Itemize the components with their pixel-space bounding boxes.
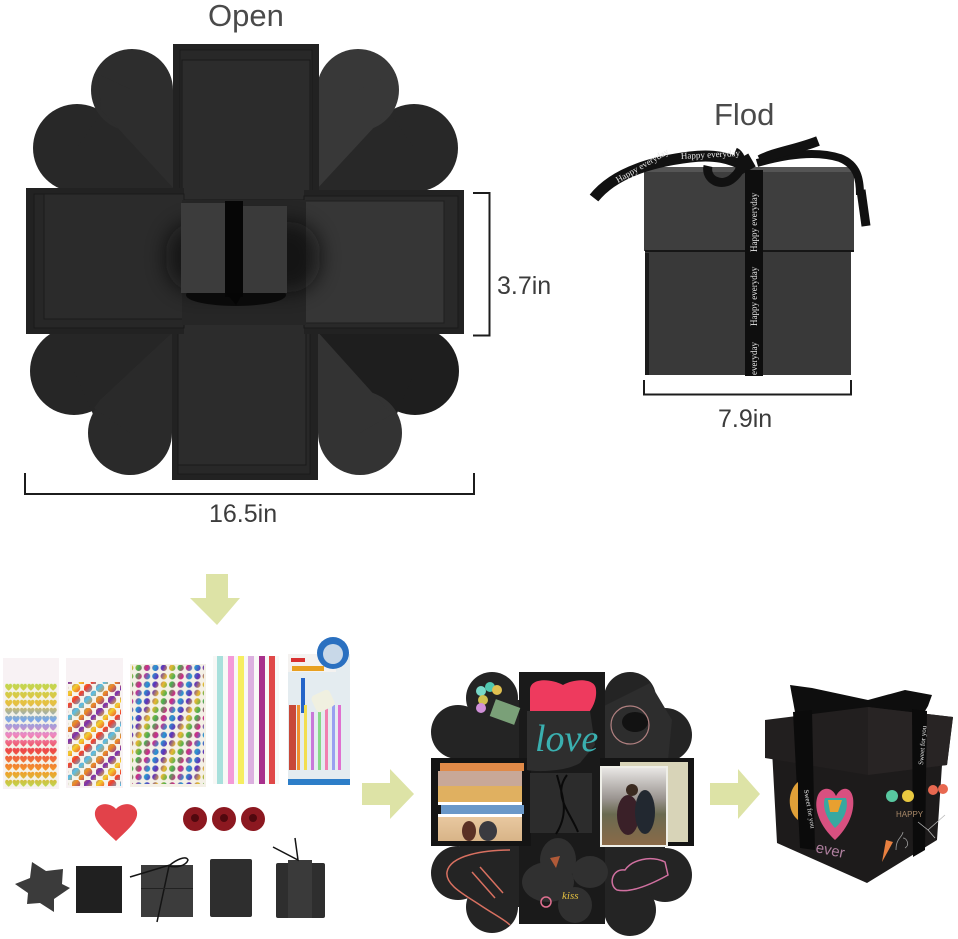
- vertical ribbon: Happy everyday: [749, 266, 759, 326]
- right photo panel: [600, 758, 694, 846]
- rainbow heart interior: [824, 798, 847, 828]
- panel: left: [26, 188, 184, 334]
- lid top edge: [646, 167, 852, 172]
- left photo panel: [431, 758, 531, 846]
- sticker sheet: flowers: [66, 658, 123, 788]
- couple photo: [600, 766, 668, 847]
- star sticker: [902, 790, 914, 802]
- panel: top: [173, 44, 319, 200]
- top envelope: [527, 711, 595, 771]
- ribbon tails and bow: [594, 141, 866, 226]
- knot shadow: [166, 222, 320, 292]
- vertical ribbon: [745, 170, 763, 376]
- pink heart doodle: bottom left: [447, 850, 510, 925]
- heart flap: top left: [33, 49, 175, 192]
- box body: [645, 251, 851, 375]
- kiss lettering: kiss: [562, 890, 578, 902]
- black pinwheel insert: [15, 862, 70, 912]
- ribbon text on band: Happy everyday: [681, 148, 741, 161]
- folded paper flap: top right: [600, 683, 672, 765]
- rose: [241, 807, 265, 831]
- back photo: hands: [620, 762, 688, 842]
- black square card: [76, 866, 122, 913]
- center column panels: [519, 672, 605, 924]
- title: Flod: Flod: [714, 97, 774, 132]
- red paper heart: [95, 804, 137, 841]
- rainbow heart orange accent: [828, 800, 842, 812]
- center knot box: [530, 773, 592, 834]
- label: 16.5in: 16.5in: [209, 500, 277, 528]
- box lid: [644, 168, 854, 251]
- couple sticker: [490, 699, 520, 725]
- label: 7.9in: 7.9in: [718, 405, 772, 433]
- vertical ribbon: Happy everyday: [749, 192, 759, 252]
- ribbon bow: [790, 685, 932, 722]
- ribbon vertical left: [793, 710, 815, 850]
- carrot: [882, 840, 893, 862]
- black tag with strings: [273, 838, 325, 918]
- H sticker: [886, 790, 898, 802]
- closed decorated box: [765, 685, 953, 883]
- folded box photo: [594, 141, 866, 376]
- ribbon text: Sweet for you: [802, 789, 817, 830]
- dimension bracket: 7.9in: [644, 380, 851, 394]
- arrow: down: [190, 574, 240, 625]
- panel: right: [304, 190, 464, 334]
- opened decorated box: [431, 672, 694, 936]
- dimension bracket: 3.7in: [473, 193, 490, 336]
- arrow: right to opened box: [362, 769, 414, 819]
- body left shadow: [645, 253, 649, 375]
- forever lettering: ever: [814, 839, 846, 862]
- sticker sheet: hearts: [3, 658, 59, 789]
- lid edge: front face crease: [868, 707, 953, 775]
- panel: bottom: [172, 324, 318, 480]
- box body: [772, 750, 943, 883]
- center square: [182, 200, 306, 325]
- label: 3.7in: 3.7in: [497, 272, 551, 300]
- arrow: right to closed box: [710, 769, 760, 819]
- photo corner strips: [213, 656, 279, 784]
- heart flap: bottom right: [316, 327, 459, 475]
- crane doodle: [918, 815, 945, 838]
- black folder: [210, 859, 252, 917]
- red love card: [530, 680, 596, 711]
- ribbon text right: Sweet for you: [917, 725, 928, 765]
- happy lettering: HAPPY: [896, 810, 924, 819]
- center knot: folded paper: [181, 201, 287, 306]
- black folded envelope with string: [130, 858, 193, 922]
- heart flaps: [431, 672, 692, 936]
- orange sticker: [928, 785, 938, 795]
- gel pen pack: [288, 637, 350, 785]
- dimension bracket: 16.5in: [25, 473, 474, 494]
- heart flap: bottom left: [30, 327, 175, 475]
- box lid: [765, 707, 953, 775]
- body shadow line: [645, 250, 854, 252]
- open box photo: [26, 44, 464, 480]
- pink heart doodle: bottom right: [612, 859, 668, 891]
- sticker sheet: gems: [130, 664, 206, 787]
- bottom pinwheel: [522, 838, 608, 923]
- rose: [183, 807, 207, 831]
- vertical ribbon: everyday: [749, 342, 759, 375]
- ring icon: [541, 897, 551, 907]
- love lettering: love: [535, 718, 598, 760]
- heart flap: top right: [316, 49, 458, 192]
- circle wreath doodle: [611, 706, 649, 744]
- ribbon vertical right: [912, 709, 927, 857]
- rainbow heart: [816, 789, 853, 840]
- rabbit doodle: [896, 832, 908, 850]
- rose: [212, 807, 236, 831]
- partial heart: [790, 782, 798, 820]
- balloons sticker: [476, 682, 502, 713]
- ribbon text on tail: Happy everyday: [614, 146, 671, 185]
- wedding photos stack: [438, 763, 524, 841]
- gem icon: [550, 856, 560, 868]
- orange sticker 2: [938, 784, 948, 794]
